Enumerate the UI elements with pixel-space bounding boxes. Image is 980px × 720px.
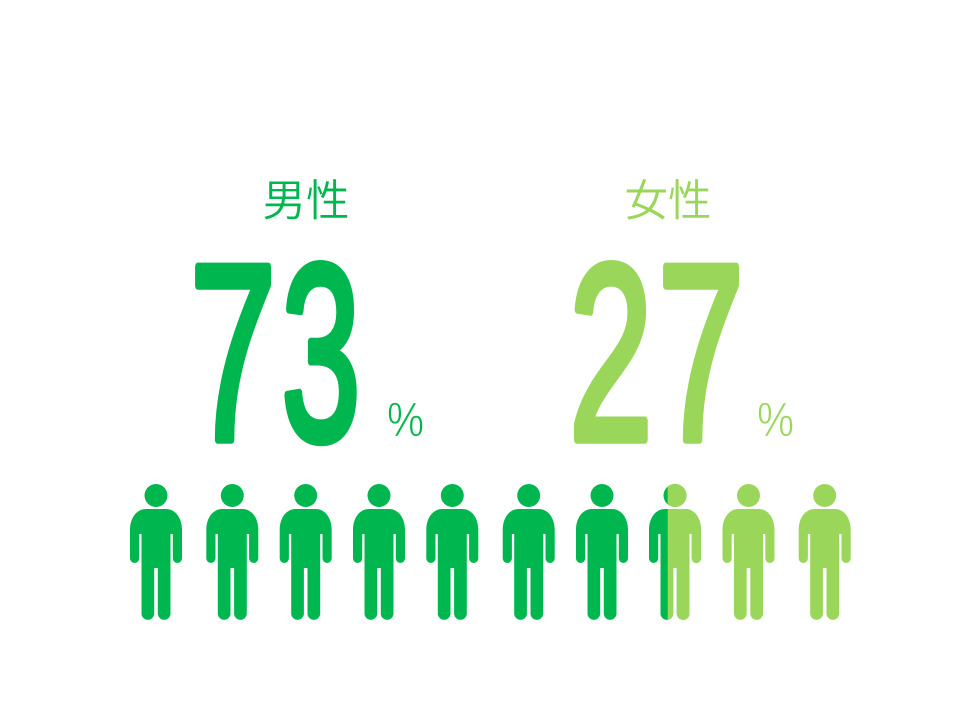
male percentage 73: 3: [281, 213, 361, 494]
male percentage 73: 7: [190, 214, 276, 494]
person 8: partly filled: [649, 484, 701, 620]
female percentage 27: [569, 213, 744, 494]
female percentage 27: 2: [569, 213, 653, 493]
male percentage 73: [190, 213, 361, 494]
male percent sign: %: [387, 392, 424, 447]
heading: female: 女性: [624, 178, 712, 226]
person 9: [722, 484, 774, 620]
person 10: [799, 484, 851, 620]
person 6: [503, 484, 555, 620]
heading: male: 男性: [262, 178, 350, 226]
person 4: [353, 484, 405, 620]
person 1: [130, 484, 182, 620]
female percentage 27: 7: [658, 214, 744, 494]
person 3: [280, 484, 332, 620]
person 5: [426, 484, 478, 620]
female percent sign: %: [757, 392, 794, 447]
person 2: [206, 484, 258, 620]
pictogram row: ten people, 73% male: [130, 484, 851, 620]
person 7: [576, 484, 628, 620]
